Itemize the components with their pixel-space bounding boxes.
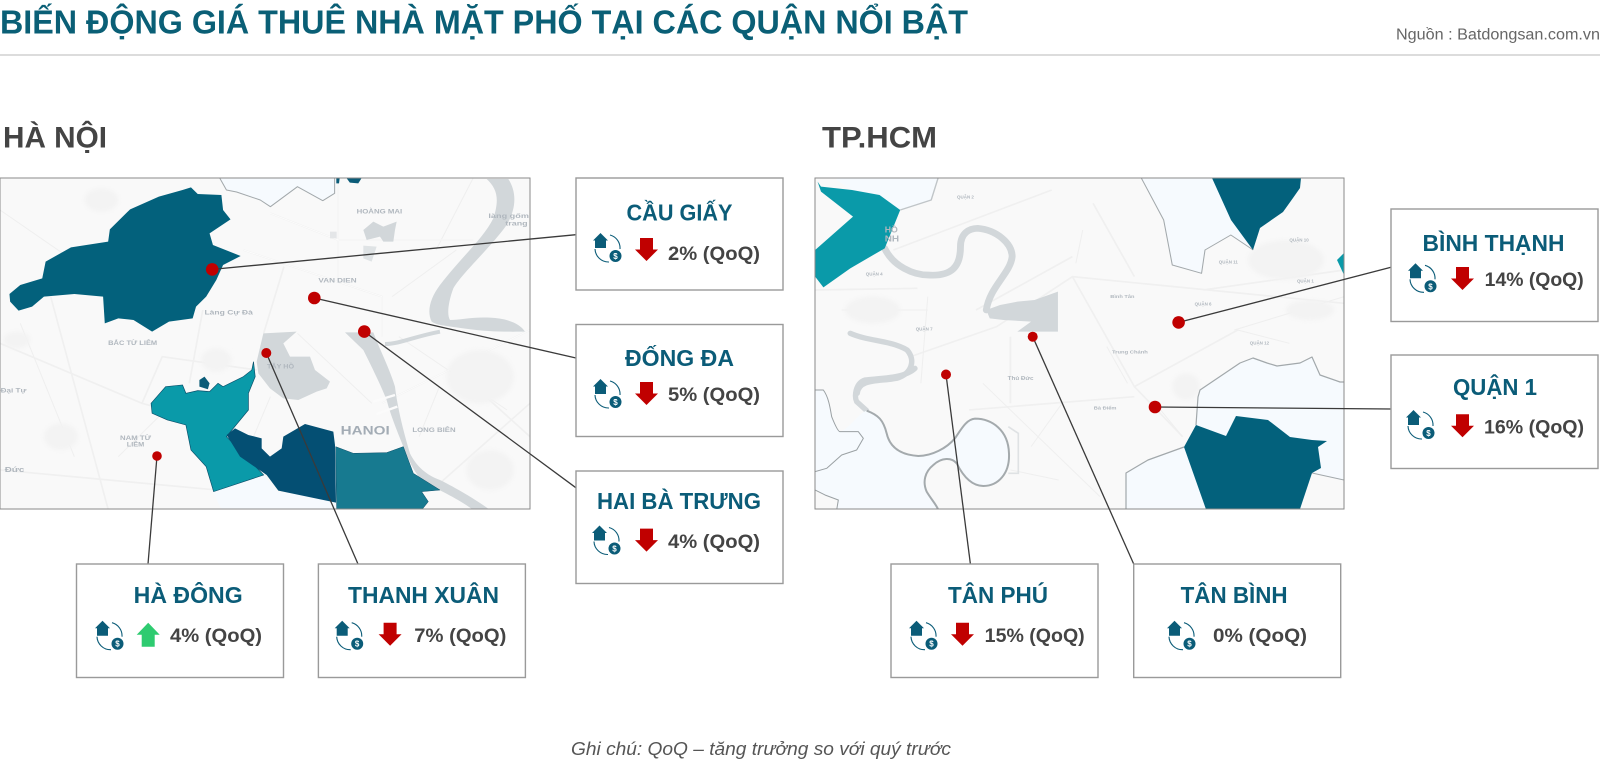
card: Bình Thạnh: BÌNH THẠNH xyxy=(1422,229,1564,256)
card: Hà Đông: 4% (QoQ) xyxy=(170,626,262,647)
card: Hai Bà Trưng xyxy=(576,471,783,584)
card: Hà Đông xyxy=(76,564,284,678)
map: Hà Nội: TÂY HỒ xyxy=(267,363,294,370)
map: Hà Nội: HOÀNG MAI xyxy=(357,208,403,215)
leader lines and location markers xyxy=(148,235,1391,564)
map: TP.HCM: QUẬN 2 xyxy=(957,194,974,199)
card: Thanh Xuân xyxy=(318,564,525,678)
icon: house price: $ xyxy=(1187,640,1192,649)
card: Tân Bình: TÂN BÌNH xyxy=(1181,581,1288,608)
card: Quận 1 xyxy=(1391,355,1598,468)
arrow: down xyxy=(635,238,658,261)
icon: house price: $ xyxy=(612,544,617,554)
district: Bình Thạnh xyxy=(1212,178,1301,250)
map: TP.HCM: QUẬN 10 xyxy=(1289,237,1309,242)
district: Quận 1 xyxy=(1184,416,1327,515)
icon: house price xyxy=(593,233,622,262)
map: Hà Nội: NAM TỪ xyxy=(120,435,151,442)
district: Hà Đông xyxy=(151,362,264,492)
icon: house price xyxy=(1406,410,1434,439)
map: Hà Nội: HANOI xyxy=(341,423,390,437)
icon: house price: $ xyxy=(355,640,360,649)
card: Cầu Giấy xyxy=(576,178,783,290)
arrow: down xyxy=(635,529,658,552)
map: TP.HCM: QUẬN 4 xyxy=(866,271,883,276)
icon: house price xyxy=(909,621,938,650)
map: TP.HCM: Trung Chánh xyxy=(1112,349,1148,355)
map: Hà Nội: LONG BIÊN xyxy=(412,426,456,434)
arrow: down xyxy=(951,623,974,646)
district: Thanh Xuân xyxy=(227,424,336,503)
footnote: Ghi chú: QoQ – tăng trưởng so với quý trước xyxy=(571,739,951,759)
card: Tân Phú: TÂN PHÚ xyxy=(948,581,1048,608)
card: Bình Thạnh xyxy=(1391,209,1598,322)
icon: house price xyxy=(593,379,622,408)
card: Hai Bà Trưng: 4% (QoQ) xyxy=(668,532,760,553)
icon: house price: $ xyxy=(613,398,618,407)
map: Hà Nội: Đại Tự xyxy=(1,388,27,395)
card: Tân Bình: 0% (QoQ) xyxy=(1213,626,1307,647)
map: Hà Nội: BẮC TỪ LIÊM xyxy=(108,339,157,347)
icon: house price xyxy=(1408,263,1436,292)
card: Đống Đa: ĐỐNG ĐA xyxy=(625,344,734,371)
map: TP.HCM: HỒ xyxy=(885,224,898,235)
map: Hà Nội: Đức xyxy=(5,465,24,474)
map: TP.HCM: QUẬN 12 xyxy=(1250,340,1270,345)
arrow: up xyxy=(137,623,160,647)
title: BIẾN ĐỘNG GIÁ THUÊ NHÀ MẶT PHỐ TẠI CÁC QUẬN NỔI BẬT xyxy=(0,2,968,40)
icon: house price xyxy=(592,526,620,555)
water: lower-left river loop xyxy=(815,368,1018,510)
card: Đống Đa: 5% (QoQ) xyxy=(668,385,760,406)
map: Hà Nội: Làng Cự Đà xyxy=(204,310,253,317)
map: TP.HCM: Bà Điểm xyxy=(1094,406,1117,411)
icon: house price: $ xyxy=(1426,429,1431,438)
card: Thanh Xuân: THANH XUÂN xyxy=(348,581,499,608)
map: TP.HCM: Thủ Đức xyxy=(1008,376,1034,382)
map: Hà Nội: LIÊM xyxy=(127,441,144,449)
icon: house price: $ xyxy=(613,252,618,261)
card: Quận 1: QUẬN 1 xyxy=(1453,373,1537,400)
icon: house price xyxy=(335,621,363,650)
map: Hà Nội: làng gốm xyxy=(488,213,529,220)
arrow: down xyxy=(379,623,402,646)
heading: Hà Nội: HÀ NỘI xyxy=(3,121,107,155)
card: Tân Phú: 15% (QoQ) xyxy=(985,626,1085,647)
river and West Lake xyxy=(257,332,490,510)
district: Cầu Giấy xyxy=(9,187,241,332)
icon: house price: $ xyxy=(115,640,120,649)
card: Thanh Xuân: 7% (QoQ) xyxy=(414,626,506,647)
river: Red River north bend xyxy=(330,179,525,332)
icon: house price xyxy=(95,621,124,650)
icon: house price xyxy=(1167,621,1196,650)
map: TP.HCM: NH xyxy=(885,235,899,244)
map: TP.HCM: QUẬN 6 xyxy=(1195,301,1212,306)
map: Hà Nội xyxy=(0,178,530,510)
map: TP.HCM: QUẬN 7 xyxy=(916,327,933,332)
district: Hai Bà Trưng xyxy=(336,447,440,510)
icon: house price: $ xyxy=(1428,282,1433,291)
card: Quận 1: 16% (QoQ) xyxy=(1484,418,1584,439)
card: Cầu Giấy: 2% (QoQ) xyxy=(668,244,760,265)
map: Hà Nội: VAN DIEN xyxy=(318,278,357,284)
map: TP.HCM xyxy=(815,178,1350,515)
arrow: down xyxy=(1451,414,1474,437)
arrow: down xyxy=(1451,267,1474,290)
card: Hà Đông: HÀ ĐÔNG xyxy=(134,581,243,608)
card: Hai Bà Trưng: HAI BÀ TRƯNG xyxy=(597,487,761,514)
card: Cầu Giấy: CẦU GIẤY xyxy=(626,198,732,226)
map: Hà Nội: trang xyxy=(505,221,528,227)
heading: TP.HCM: TP.HCM xyxy=(822,122,937,155)
map: TP.HCM: QUẬN 1 xyxy=(1297,279,1314,284)
card: Bình Thạnh: 14% (QoQ) xyxy=(1485,270,1584,291)
map: TP.HCM: QUẬN 11 xyxy=(1219,259,1238,264)
water: east xyxy=(1184,357,1350,515)
card: Tân Bình xyxy=(1134,564,1341,678)
map: TP.HCM: Bình Tân xyxy=(1110,294,1135,299)
source note: Nguồn : Batdongsan.com.vn xyxy=(1396,26,1600,44)
district: Tân Phú xyxy=(815,182,900,287)
card: Tân Phú xyxy=(891,564,1098,678)
card: Đống Đa xyxy=(576,324,783,436)
icon: house price: $ xyxy=(929,640,934,649)
arrow: down xyxy=(635,382,658,405)
